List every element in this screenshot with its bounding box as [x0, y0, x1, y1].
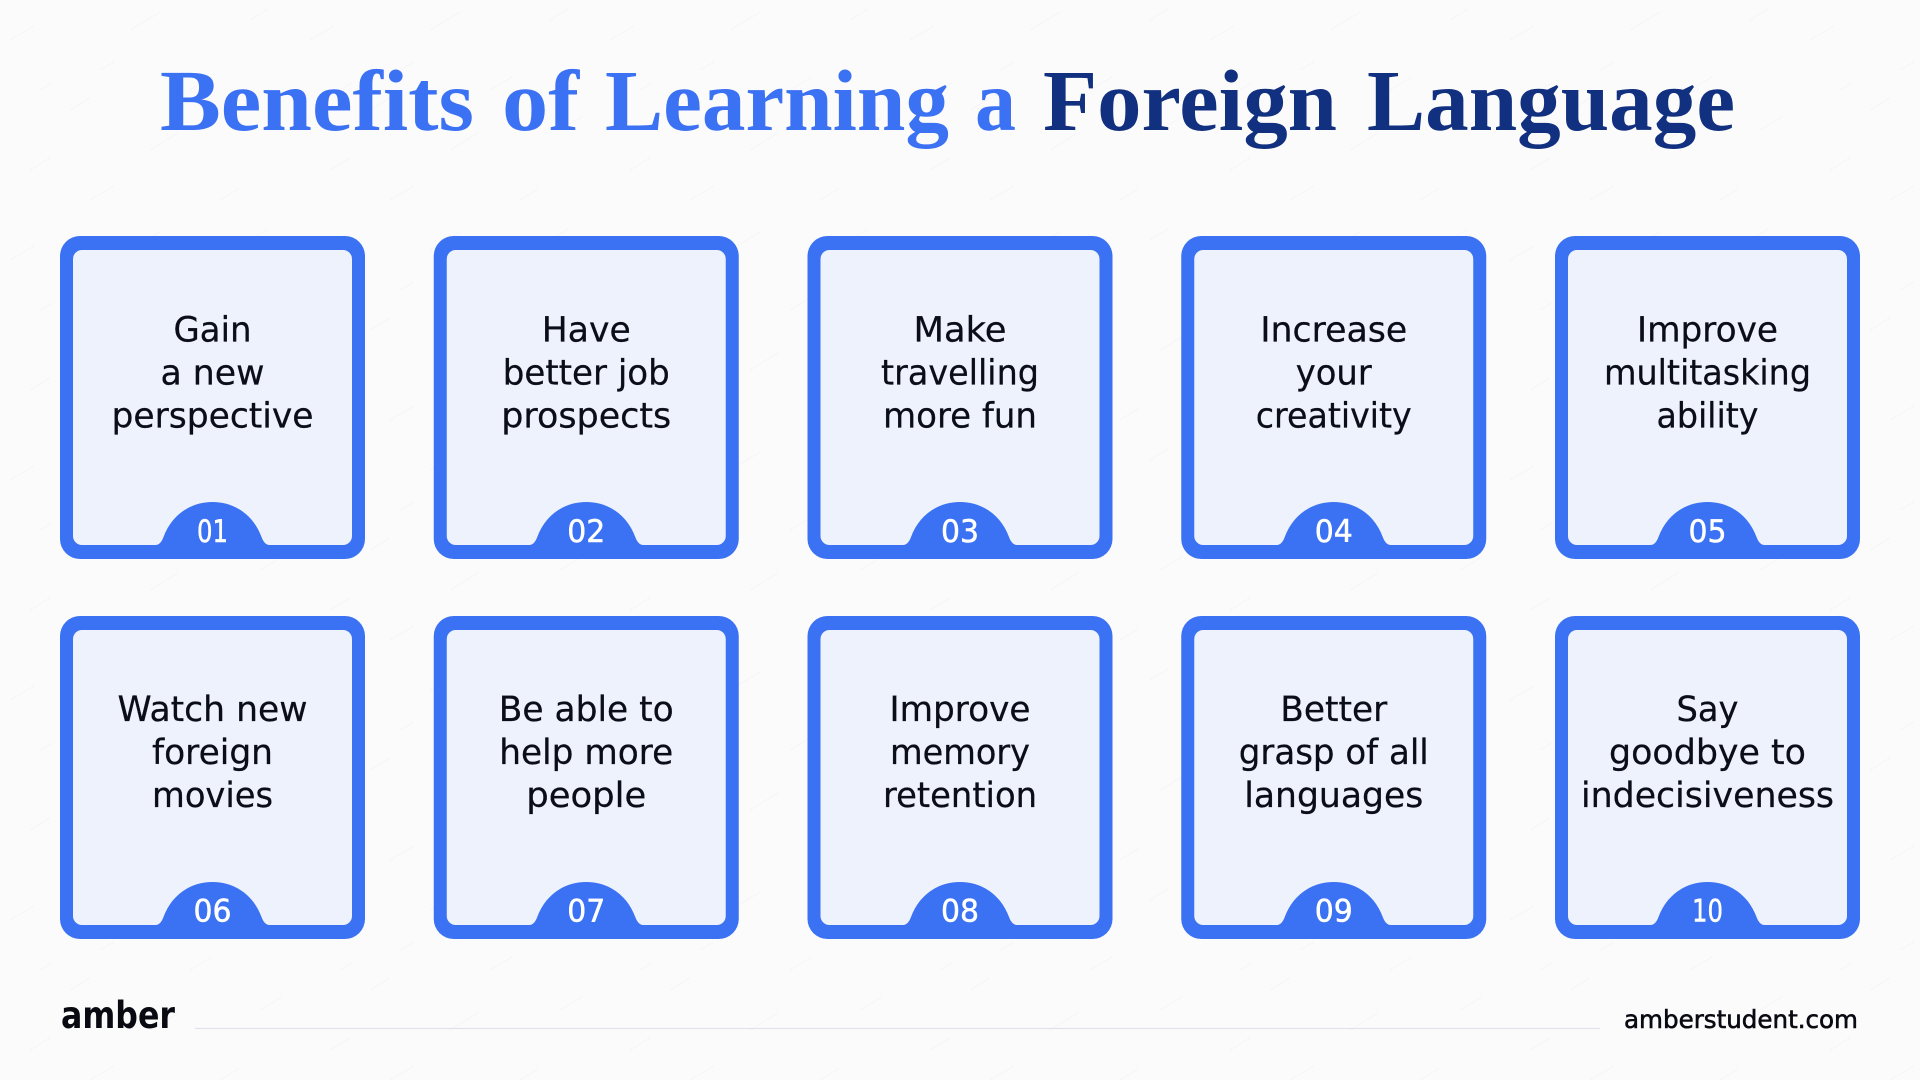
- panel: card 08: [808, 616, 1112, 939]
- panel: card 07: [434, 616, 739, 939]
- panel: card 05: [1555, 236, 1860, 559]
- panel: card 06: [60, 616, 365, 939]
- panel: card 04: 04: [1315, 514, 1353, 550]
- panel: card 09: grasp of all: [1239, 733, 1429, 773]
- panel: card 08: memory: [890, 733, 1030, 773]
- panel: card 10: Say: [1676, 690, 1738, 730]
- panel: card 01: Gain: [174, 310, 252, 350]
- panel: card 09: 09: [1315, 894, 1353, 930]
- panel: card 02: 02: [567, 514, 605, 550]
- panel: card 04: [1181, 236, 1486, 559]
- panel: card 03: travelling: [881, 354, 1039, 394]
- panel: card 04: Increase: [1260, 310, 1407, 350]
- panel: card 02: prospects: [501, 396, 671, 436]
- panel: card 05: ability: [1656, 396, 1758, 436]
- panel: card 07: people: [526, 776, 646, 816]
- title: Language: [1367, 52, 1735, 149]
- panel: card 05: Improve: [1637, 310, 1778, 350]
- panel: card 01: [60, 236, 365, 559]
- panel: card 10: 10: [1692, 894, 1723, 930]
- panel: card 05: 05: [1688, 514, 1726, 550]
- panel: card 08: Improve: [890, 690, 1030, 730]
- panel: card 07: 07: [567, 894, 605, 930]
- panel: card 02: [434, 236, 739, 559]
- panel: card 02: better job: [503, 354, 670, 394]
- panel: card 03: 03: [941, 514, 979, 550]
- panel: card 02: Have: [542, 310, 631, 350]
- title: of: [502, 52, 580, 149]
- panel: card 06: 06: [194, 894, 232, 930]
- title: [160, 52, 1735, 149]
- panel: card 03: [808, 236, 1112, 559]
- title: Learning: [605, 52, 949, 149]
- panel: card 05: multitasking: [1604, 354, 1811, 394]
- panel: card 01: perspective: [112, 396, 314, 436]
- panel: card 10: indecisiveness: [1581, 776, 1834, 816]
- panel: card 07: help more: [499, 733, 673, 773]
- panel: card 09: languages: [1244, 776, 1423, 816]
- panel: card 06: Watch new: [118, 690, 308, 730]
- panel: card 04: your: [1296, 354, 1373, 394]
- panel: card 08: retention: [883, 776, 1037, 816]
- panel: card 06: movies: [152, 776, 273, 816]
- panel: card 04: creativity: [1256, 396, 1412, 436]
- footer website url: amberstudent.com: [1624, 1005, 1858, 1034]
- panel: card 07: Be able to: [499, 690, 674, 730]
- title: Benefits: [160, 52, 474, 149]
- panel: card 09: [1181, 616, 1486, 939]
- panel: card 01: a new: [160, 354, 264, 394]
- panel: card 06: foreign: [152, 733, 273, 773]
- panel: card 10: goodbye to: [1609, 733, 1806, 773]
- title: Foreign: [1043, 52, 1337, 149]
- panel: card 09: Better: [1280, 690, 1388, 730]
- title: a: [975, 52, 1016, 149]
- panel: card 03: Make: [914, 310, 1006, 350]
- panel: card 01: 01: [197, 514, 228, 550]
- panel: card 03: more fun: [883, 396, 1037, 436]
- footer logo: amber: amber: [61, 994, 176, 1037]
- panel: card 08: 08: [941, 894, 979, 930]
- panel: card 10: [1555, 616, 1860, 939]
